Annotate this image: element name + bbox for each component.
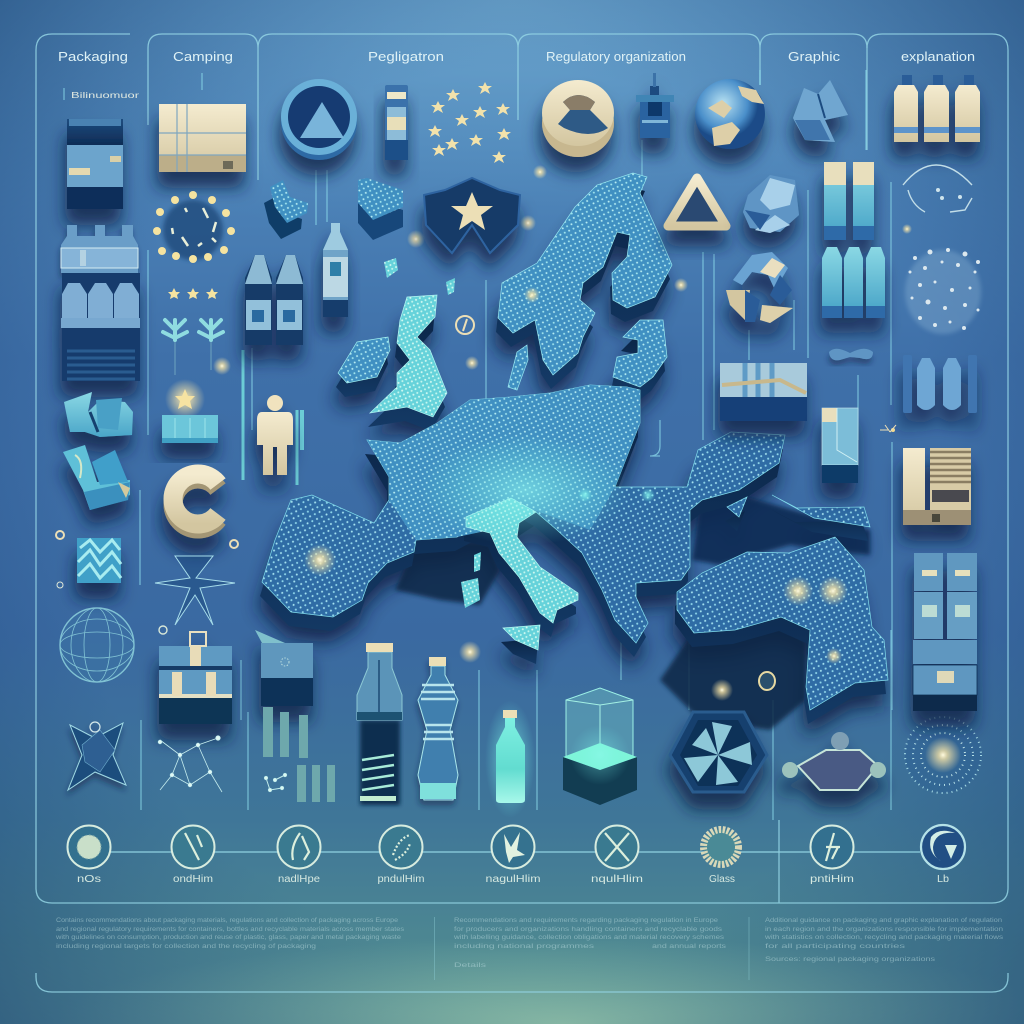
footer text column 2: Details xyxy=(454,962,486,969)
footer dividers xyxy=(434,917,749,980)
label: pndulHim xyxy=(378,874,424,885)
icon: earth globe xyxy=(695,79,765,149)
footer text column 3: with statistics on collection, recycling and packaging material flows xyxy=(764,934,1003,941)
europe map xyxy=(258,173,888,736)
icon: circle texture xyxy=(68,826,110,868)
icon: single bottle xyxy=(323,223,348,317)
icon: small network xyxy=(264,773,287,792)
icon: hexagon star badge xyxy=(424,178,520,253)
icon: folded material top xyxy=(64,392,133,437)
map: caucasus xyxy=(727,495,870,527)
icon: stars row xyxy=(168,288,218,299)
icon: wire globe xyxy=(60,608,134,682)
icon: person xyxy=(257,395,293,475)
heading: graphic: Graphic xyxy=(788,49,841,64)
sparkles xyxy=(56,165,912,690)
icon: plants xyxy=(163,320,223,375)
icon: wire star xyxy=(155,556,235,625)
label: Glass xyxy=(709,874,735,885)
footer text column 1 xyxy=(55,917,404,950)
label: pntiHim xyxy=(810,874,854,885)
icon: three bottles xyxy=(894,75,980,142)
icon: cross xyxy=(596,826,638,868)
sub-heading: Bilinuomuor xyxy=(71,90,139,100)
icon: cream box xyxy=(159,104,246,172)
heading: regulatory organization: Regulatory organization xyxy=(546,49,686,64)
icon: blue carton stack xyxy=(913,553,977,711)
icon: hexagon fan xyxy=(670,712,767,792)
icon: teal bars xyxy=(824,162,874,240)
heading: camping: Camping xyxy=(173,49,233,64)
footer text column 2: including national programmes xyxy=(454,943,594,950)
icon: tall rectangle xyxy=(822,408,858,483)
label: nqulHlim xyxy=(591,874,643,885)
map: mainland europe xyxy=(262,385,785,643)
icon: star polyhedron xyxy=(68,722,126,790)
icon: cream striped box xyxy=(903,448,971,525)
icon: tray with orbs xyxy=(782,732,886,790)
icon: tool xyxy=(810,826,854,868)
icon: teal carton xyxy=(162,415,218,443)
decorative callout lines xyxy=(64,70,892,820)
icon: cream letter C xyxy=(173,474,218,529)
icon: bottle pack xyxy=(61,225,138,273)
label: nadlHpe xyxy=(278,874,320,885)
heading: packaging: Packaging xyxy=(58,49,128,64)
map glows xyxy=(304,215,848,701)
footer text column 3: for all participating countries xyxy=(765,943,905,950)
map: ireland xyxy=(338,337,390,383)
icon: token ring xyxy=(456,316,474,334)
map: small islands xyxy=(384,258,481,608)
icon: suitcase xyxy=(159,632,232,724)
icon: bow xyxy=(829,349,873,360)
label: Lb xyxy=(937,874,949,885)
icon: arc lens xyxy=(903,165,972,212)
map: turkey xyxy=(677,537,888,710)
footer text column 3: Sources: regional packaging organizations xyxy=(765,956,935,963)
label: ondHim xyxy=(173,874,213,885)
icon: leaf specks xyxy=(380,826,422,868)
icon: cream C ring xyxy=(542,80,614,157)
footer text column 2: and annual reports xyxy=(652,943,726,950)
icon: recycle cube xyxy=(793,80,848,142)
icon: star with glow xyxy=(165,357,231,419)
footer text column 2: with labelling guidance, collection obligations and material recovery schemes xyxy=(453,934,724,941)
icon: stacked crate xyxy=(61,273,140,381)
footer text column 1: and regional regulatory requirements for containers, bottles and recyclable materials across member states xyxy=(56,926,404,933)
icon: constellation network xyxy=(158,736,222,792)
icon: ring with triangle xyxy=(281,79,357,160)
icon: folded material xyxy=(63,445,130,510)
icon: scattered stars xyxy=(428,82,511,163)
footer text column 1: with guidelines on consumption, production and reuse of plastic, glass, paper and metal packaging waste xyxy=(55,934,402,941)
label: nagulHlim xyxy=(486,874,540,885)
heading: regulation: Pegligatron xyxy=(368,49,444,64)
footer text column 2: for producers and organizations handling containers and recyclable goods xyxy=(454,926,722,933)
icon: water bottle xyxy=(418,657,458,800)
icon: glass cube xyxy=(563,688,637,805)
icon: splash xyxy=(492,826,534,868)
icon: glass bottle xyxy=(357,643,402,805)
icon: glowing particle sphere xyxy=(905,717,981,793)
icon: hook xyxy=(278,826,320,868)
icon: pair of bottles xyxy=(245,255,303,345)
footer text column 2: Recommendations and requirements regarding packaging regulation in Europe xyxy=(454,917,719,924)
footer text column 3: in each region and the organizations responsible for implementation xyxy=(765,926,1004,933)
icon: slash xyxy=(172,826,214,868)
icon: device xyxy=(636,73,674,138)
map: great britain xyxy=(370,295,447,417)
footer text column 3: Additional guidance on packaging and graphic explanation of regulation xyxy=(765,917,1003,924)
icon row connecting line xyxy=(110,851,920,853)
map shadows xyxy=(258,187,886,736)
icon: glowing bottle xyxy=(485,700,535,818)
icon: textile block xyxy=(77,538,121,583)
footer text column 2 xyxy=(453,917,726,969)
icon: four bottles xyxy=(903,355,977,413)
icon row xyxy=(68,825,965,885)
label: nOs xyxy=(77,874,101,885)
footer text column 1: Contains recommendations about packaging materials, regulations and collection of packaging across Europe xyxy=(56,917,398,924)
icon: striped carton xyxy=(720,363,807,421)
map: northern islands xyxy=(264,178,403,240)
map: scandinavia xyxy=(498,173,672,390)
map: italy xyxy=(466,498,578,650)
icon: tall bottle xyxy=(385,85,408,160)
icon: recycle symbol xyxy=(726,252,793,323)
heading: explanation: explanation xyxy=(901,49,975,64)
footer text column 1: including regional targets for collection and the recycling of packaging xyxy=(56,943,317,950)
icon: cream triangle xyxy=(668,178,726,226)
icon: particle cloud xyxy=(905,248,981,334)
icon: gear ring xyxy=(704,830,738,864)
icon: ring of stars xyxy=(153,191,235,263)
icon: crumpled rock xyxy=(743,175,799,233)
icon: recycle dark xyxy=(921,825,965,869)
icon: short bars xyxy=(263,707,335,802)
icon: teal bottles xyxy=(822,247,885,318)
footer text column 3 xyxy=(764,917,1004,963)
icon: blue bag xyxy=(255,630,313,706)
column headings xyxy=(58,49,975,100)
icon: packaging box xyxy=(67,119,123,209)
